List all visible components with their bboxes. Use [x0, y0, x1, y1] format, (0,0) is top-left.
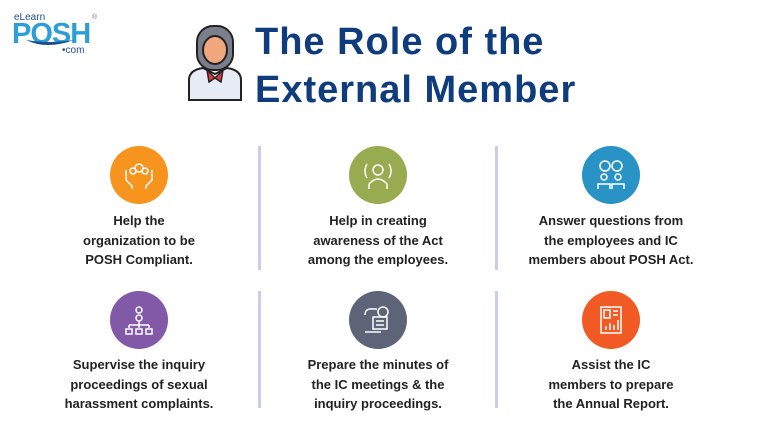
panel: questions: [529, 146, 693, 267]
text: Prepare the minutes of: [308, 357, 448, 372]
text: Supervise the inquiry: [73, 357, 205, 372]
logo: [12, 12, 98, 56]
panel: minutes: [308, 291, 448, 411]
panel: supervise: [65, 291, 213, 411]
text: organization to be: [83, 232, 195, 248]
text: [548, 357, 674, 411]
text: the employees and IC: [544, 232, 678, 248]
text: POSH Compliant.: [85, 252, 193, 267]
icon: hands with people: [110, 146, 168, 204]
title: [255, 21, 576, 111]
panel: compliant: [83, 146, 195, 267]
text: Help in creating: [329, 213, 427, 228]
text: Help the: [113, 213, 165, 228]
icon: document gear: [349, 291, 407, 349]
text: Answer questions from: [539, 213, 683, 228]
panel: annual report: [548, 291, 674, 411]
logo: ®: [92, 14, 97, 21]
icon: report: [582, 291, 640, 349]
title: External Member: [255, 69, 576, 111]
logo: POSH: [12, 18, 90, 50]
text: proceedings of sexual: [70, 376, 208, 392]
icon: external member avatar: [188, 25, 242, 101]
logo: eLearn: [14, 12, 45, 23]
text: [308, 213, 448, 267]
panel: awareness: [308, 146, 448, 267]
text: members to prepare: [548, 376, 674, 392]
text: awareness of the Act: [313, 232, 443, 248]
text: the IC meetings & the: [312, 376, 444, 392]
text: among the employees.: [308, 252, 448, 267]
text: [65, 357, 213, 411]
icon: hierarchy: [110, 291, 168, 349]
text: inquiry proceedings.: [314, 396, 442, 411]
text: [83, 213, 195, 267]
title: The Role of the: [255, 21, 544, 63]
text: harassment complaints.: [65, 396, 213, 411]
icon: question bubbles: [582, 146, 640, 204]
text: members about POSH Act.: [529, 252, 693, 267]
logo: •com: [62, 45, 84, 56]
text: [308, 357, 448, 411]
text: Assist the IC: [572, 357, 650, 372]
text: [529, 213, 693, 267]
icon: broadcasting person: [349, 146, 407, 204]
text: the Annual Report.: [553, 396, 669, 411]
